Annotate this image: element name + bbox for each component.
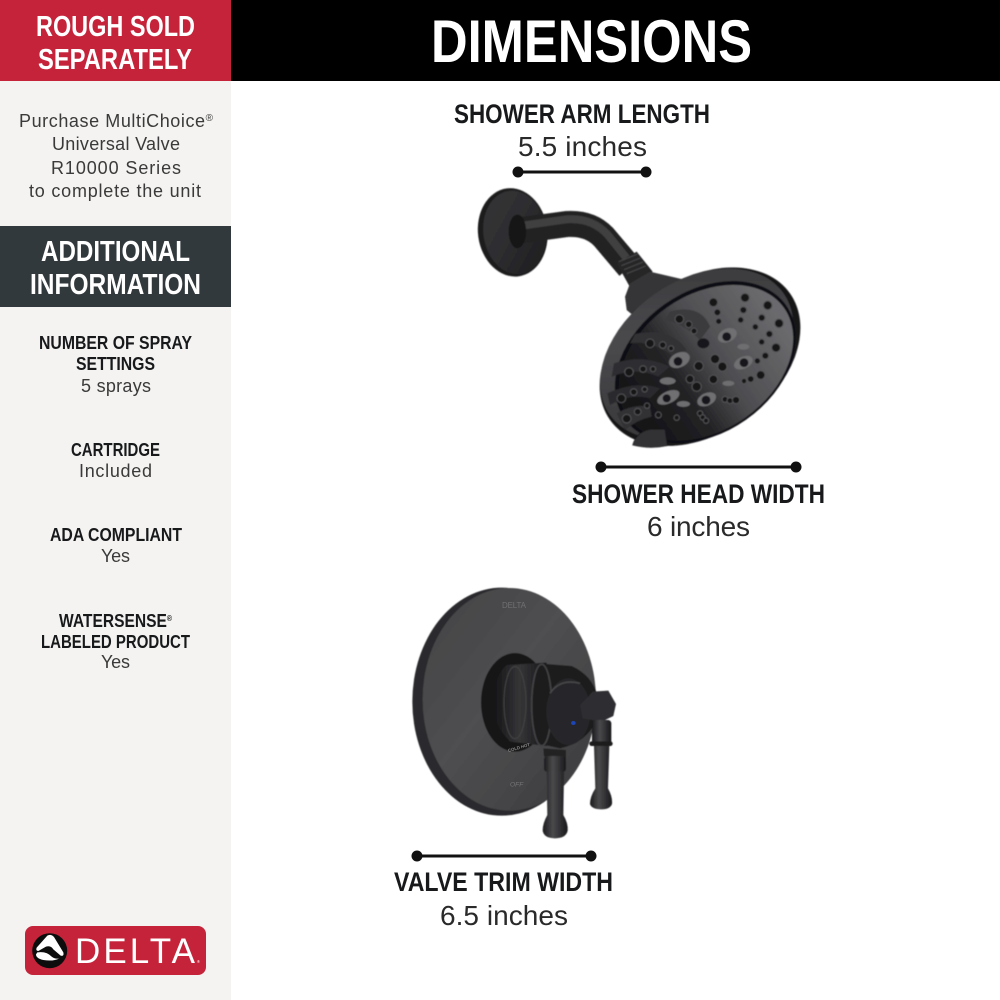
label: shower head width (572, 479, 825, 542)
dimension line: head (596, 462, 802, 472)
product image: valve trim (412, 588, 616, 838)
flange (472, 184, 553, 281)
spec: cartridge: CARTRIDGE (71, 440, 160, 460)
label: shower head width: 6 inches (647, 511, 750, 542)
label: shower arm length: 5.5 inches (518, 131, 647, 162)
thread (617, 252, 653, 286)
spec: ada compliant: Yes (101, 546, 130, 566)
blue indicator (571, 721, 576, 725)
label: valve trim width: VALVE TRIM WIDTH (394, 867, 613, 897)
text block: purchase note (19, 111, 214, 201)
title bar: dimensions: DIMENSIONS (431, 8, 752, 75)
neck (625, 272, 682, 318)
text block: purchase note: to complete the unit (29, 181, 201, 201)
heading: additional information: INFORMATION (30, 269, 201, 301)
spec: spray settings: 5 sprays (81, 376, 151, 396)
logo: delta: ® (197, 959, 200, 964)
banner: rough sold separately (0, 0, 231, 81)
text block: purchase note: ® (206, 113, 214, 124)
blades (665, 309, 710, 340)
spec: watersense: Yes (101, 652, 130, 672)
lever: upper right (580, 691, 616, 809)
spec: watersense (41, 611, 190, 672)
spec: spray settings: SETTINGS (76, 354, 155, 374)
label: shower arm length (454, 99, 710, 162)
spec: spray settings: NUMBER OF SPRAY (39, 333, 192, 353)
hub dome (531, 663, 597, 748)
spec: cartridge: Included (79, 461, 152, 481)
spray face (584, 248, 827, 476)
label: shower arm length: SHOWER ARM LENGTH (454, 99, 710, 129)
text block: purchase note: Universal Valve (52, 134, 180, 154)
craters (655, 325, 755, 409)
clip tab (633, 429, 667, 447)
banner: rough sold separately: ROUGH SOLD (36, 11, 195, 43)
plate text: DELTA (502, 601, 527, 610)
product image: shower head (472, 184, 834, 483)
spec: ada compliant: ADA COMPLIANT (50, 525, 182, 545)
dimension line: arm (512, 166, 652, 178)
lever: lower (543, 748, 568, 838)
label: shower head width: SHOWER HEAD WIDTH (572, 479, 825, 509)
logo: delta (25, 926, 206, 975)
label: valve trim width (394, 867, 613, 931)
spec: spray settings (39, 333, 192, 396)
text block: purchase note: Purchase MultiChoice (19, 111, 205, 131)
heading: additional information (0, 226, 231, 307)
spec: cartridge (71, 440, 160, 481)
hub body (493, 663, 547, 746)
text block: purchase note: R10000 Series (51, 158, 181, 178)
label: valve trim width: 6.5 inches (440, 900, 568, 931)
title bar: dimensions (231, 0, 1000, 81)
spec: watersense: LABELED PRODUCT (41, 632, 190, 652)
banner: rough sold separately: SEPARATELY (38, 44, 192, 76)
shower arm (515, 224, 629, 267)
hub base (481, 653, 549, 752)
spec: ada compliant (50, 525, 182, 566)
head rim (566, 230, 834, 483)
spec: watersense: WATERSENSE (59, 611, 184, 631)
product image: valve trim: OFF (510, 782, 524, 789)
heading: additional information: ADDITIONAL (41, 236, 190, 268)
dimension line: valve (412, 850, 596, 862)
panel: sidebar (0, 0, 231, 1000)
logo: delta: DELTA (75, 932, 196, 971)
product image: valve trim: COLD HOT (507, 742, 531, 753)
plate (412, 588, 591, 816)
nozzles (617, 293, 783, 423)
spec: watersense: ® (167, 614, 172, 623)
